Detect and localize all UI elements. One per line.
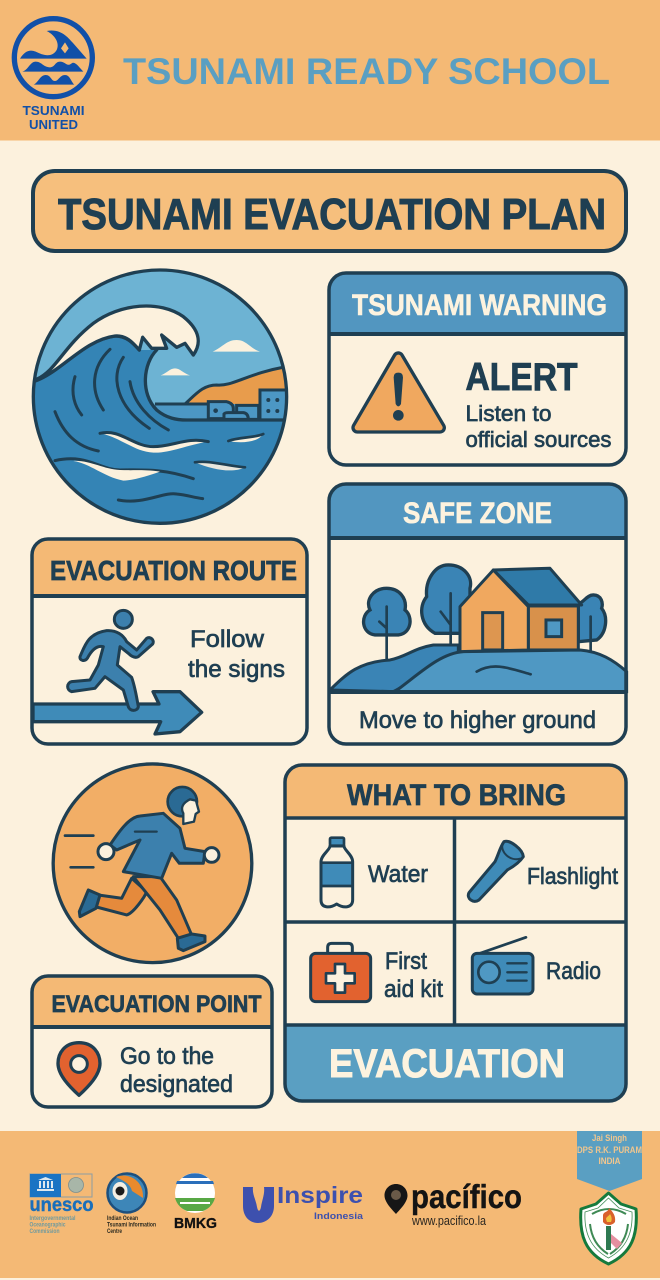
label: first aid kit: First <box>385 948 427 975</box>
label: flashlight: Flashlight <box>527 863 619 889</box>
heading: evacuation point: EVACUATION POINT <box>52 991 262 1018</box>
panel: evacuation route <box>32 539 307 744</box>
header title: TSUNAMI READY SCHOOL <box>123 51 610 92</box>
heading: tsunami warning: TSUNAMI WARNING <box>352 289 607 322</box>
text: go to the designated: designated <box>120 1071 233 1098</box>
logo wordmark: TSUNAMI <box>22 104 84 118</box>
logo: Inspire Indonesia: Inspire <box>277 1182 363 1208</box>
icon: Tsunami United logo <box>14 19 92 97</box>
icon: radio <box>472 937 533 994</box>
logo: BMKG <box>174 1173 217 1232</box>
icon: flashlight <box>468 841 523 901</box>
heading: evacuation route: EVACUATION ROUTE <box>50 555 297 586</box>
ribbon: author credit: INDIA <box>598 1156 621 1166</box>
icon: water bottle <box>321 838 353 907</box>
text: follow the signs <box>188 626 285 683</box>
panel: safe zone <box>329 484 627 744</box>
text: go to the designated <box>120 1043 233 1098</box>
logo: pacifico <box>384 1178 522 1228</box>
text: follow the signs: Follow <box>190 626 264 653</box>
illustration: house on hill <box>330 565 627 692</box>
logo: UNESCO: Commission <box>30 1229 60 1235</box>
ribbon: author credit <box>577 1131 642 1191</box>
logo: Indian Ocean Tsunami Information Centre <box>107 1174 156 1235</box>
text: follow the signs: the signs <box>188 656 285 683</box>
label: first aid kit: aid kit <box>384 976 443 1003</box>
logo wordmark <box>22 104 84 132</box>
logo: pacifico: www.pacifico.la <box>411 1213 487 1228</box>
footer band <box>0 1131 660 1278</box>
heading: safe zone: SAFE ZONE <box>403 497 552 530</box>
ribbon: author credit: DPS R.K. PURAM <box>577 1145 642 1155</box>
panel: what to bring <box>285 765 626 1101</box>
panel: tsunami warning <box>329 273 626 465</box>
logo wordmark: UNITED <box>29 118 78 132</box>
illustration: running person circle <box>53 764 252 963</box>
logo: UNESCO <box>30 1174 94 1235</box>
ribbon: author credit: Jai Singh <box>592 1133 627 1143</box>
banner: evacuation: EVACUATION <box>329 1042 565 1086</box>
icon: first aid kit <box>311 943 371 1002</box>
logo: UNESCO: unesco <box>30 1195 94 1216</box>
icon: warning triangle <box>357 357 440 428</box>
logo: Indian Ocean Tsunami Information Centre: Tsunami Information <box>107 1222 156 1228</box>
header band <box>0 0 660 140</box>
logo: UNESCO: Intergovernmental <box>30 1216 76 1222</box>
logo: pacifico: pacífico <box>411 1178 522 1215</box>
icon: location pin <box>58 1043 100 1095</box>
text: go to the designated: Go to the <box>120 1043 214 1070</box>
logo: school crest <box>581 1193 636 1264</box>
icon: running figure <box>68 610 153 710</box>
title banner <box>33 171 626 251</box>
logo: UNESCO: Oceanographic <box>30 1222 66 1228</box>
logo: Indian Ocean Tsunami Information Centre: Centre <box>107 1229 123 1235</box>
logo: Indian Ocean Tsunami Information Centre: Indian Ocean <box>107 1216 138 1222</box>
icon: arrow <box>33 692 202 734</box>
alert text <box>466 356 612 452</box>
illustration: tsunami wave circle <box>20 270 290 527</box>
alert text: official sources <box>466 427 612 452</box>
alert text: ALERT <box>466 356 578 399</box>
alert text: Listen to <box>466 401 552 426</box>
label: water: Water <box>368 861 428 888</box>
label: radio: Radio <box>546 958 601 985</box>
panel: evacuation point <box>32 976 272 1107</box>
label: first aid kit <box>384 948 443 1003</box>
heading: what to bring: WHAT TO BRING <box>347 779 566 812</box>
caption: move to higher ground: Move to higher ground <box>359 707 596 734</box>
logo: Inspire Indonesia <box>243 1182 364 1223</box>
logo: Inspire Indonesia: Indonesia <box>314 1211 364 1221</box>
logo: BMKG: BMKG <box>174 1215 217 1232</box>
